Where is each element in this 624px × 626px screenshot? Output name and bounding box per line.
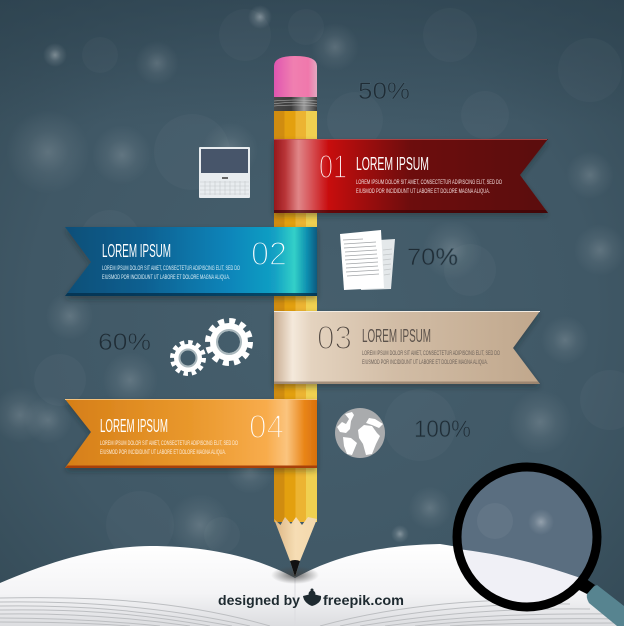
number 02: 02 (251, 235, 287, 272)
icon: gears (172, 321, 250, 374)
icon: documents (340, 230, 395, 290)
ribbon 1 text (356, 179, 502, 195)
pencil eraser (274, 56, 317, 98)
ribbon 2 (65, 227, 317, 296)
number 04: 04 (249, 408, 284, 445)
icon: laptop (199, 147, 250, 198)
ribbon 2 heading: LOREM IPSUM (102, 241, 171, 261)
percentage 50%: 50% (358, 78, 410, 105)
magnifier handle (587, 585, 624, 626)
credit line (218, 588, 404, 608)
ribbon 2 text: LOREM IPSUM DOLOR SIT AMET, CONSECTETUR ADIPISCING ELIT, SED DO (102, 265, 240, 272)
credit line: designed by (218, 593, 301, 608)
ribbon 3 heading: LOREM IPSUM (362, 326, 431, 346)
ribbon 2 text (102, 265, 240, 281)
magnifier lens (440, 467, 600, 610)
percentage 60%: 60% (98, 329, 151, 356)
ribbon 3 (274, 311, 540, 384)
large gear (208, 321, 250, 363)
icon: globe (335, 408, 385, 458)
ribbon 3 text: EIUSMOD POR INCIDIDUNT UT LABORE ET DOLORE MAGNA ALIQUA. (362, 359, 488, 366)
number 01: 01 (319, 148, 347, 185)
credit line: freepik.com (323, 593, 404, 608)
pencil body (274, 108, 317, 522)
pencil (274, 56, 317, 577)
ribbon 4 text: LOREM IPSUM DOLOR SIT AMET, CONSECTETUR ADIPISCING ELIT, SED DO (100, 440, 238, 447)
ribbon 1 text: EIUSMOD POR INCIDIDUNT UT LABORE ET DOLORE MAGNA ALIQUA. (356, 188, 490, 195)
pencil lead (290, 560, 300, 577)
ribbon 3 text (362, 350, 500, 366)
ribbon 1 (274, 139, 548, 213)
ribbon 2 text: EIUSMOD POR INCIDIDUNT UT LABORE ET DOLORE MAGNA ALIQUA. (102, 274, 230, 281)
ribbon 1 text: LOREM IPSUM DOLOR SIT AMET, CONSECTETUR ADIPISCING ELIT, SED DO (356, 179, 502, 186)
ribbon 4 heading: LOREM IPSUM (100, 416, 168, 436)
magnifying glass (440, 467, 624, 626)
percentage 100%: 100% (414, 416, 471, 443)
ribbon 4 text: EIUSMOD POR INCIDIDUNT UT LABORE ET DOLORE MAGNA ALIQUA. (100, 449, 226, 456)
number 03: 03 (317, 319, 352, 356)
pencil ferrule (274, 97, 317, 111)
ribbon 4 (65, 399, 317, 468)
pencil tip (274, 517, 317, 577)
percentage 70%: 70% (407, 244, 458, 271)
ribbon 3 text: LOREM IPSUM DOLOR SIT AMET, CONSECTETUR ADIPISCING ELIT, SED DO (362, 350, 500, 357)
ribbon 4 text (100, 440, 238, 456)
icon: freepik logo (303, 588, 321, 606)
open book (0, 544, 624, 626)
ribbon 1 heading: LOREM IPSUM (356, 154, 429, 174)
small gear (172, 342, 204, 374)
